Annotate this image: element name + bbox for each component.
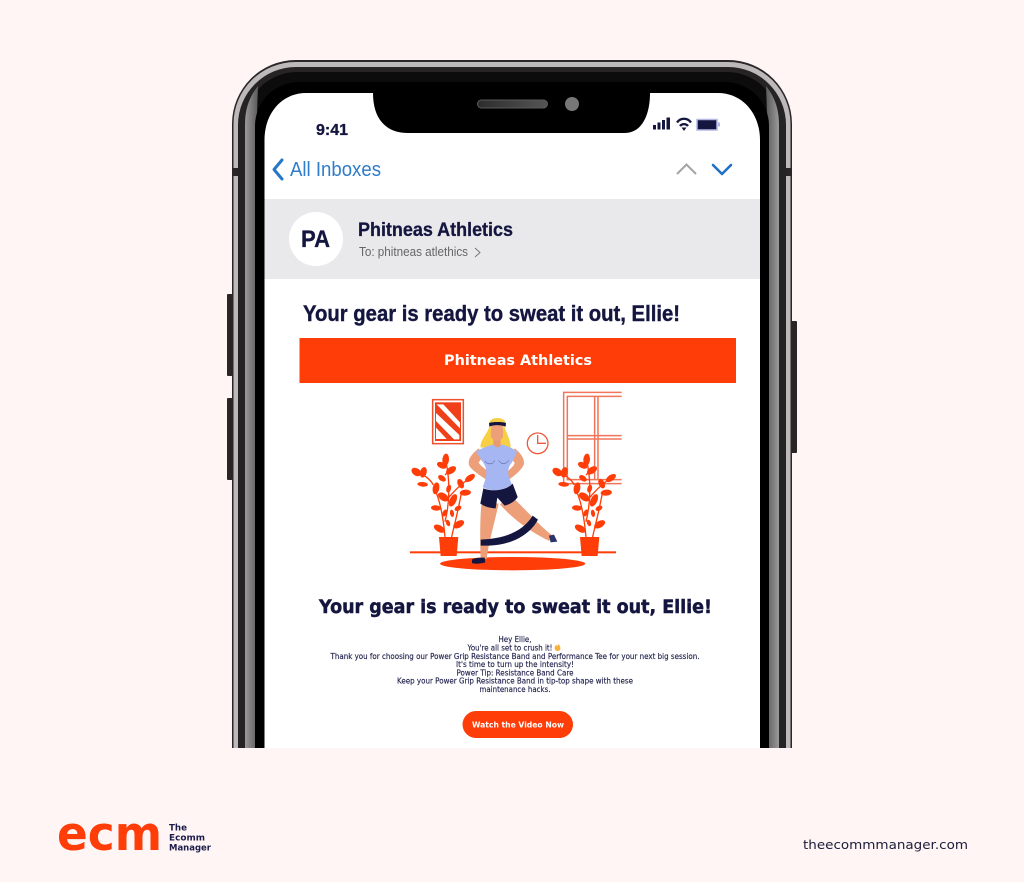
avatar xyxy=(289,212,343,266)
body copy: You're all set to crush it! xyxy=(467,644,552,652)
body copy: Hey Ellie, xyxy=(498,635,532,644)
resistance band xyxy=(481,516,538,546)
logo: ecm The Ecomm Manager: Manager xyxy=(169,844,212,854)
status icons xyxy=(653,118,720,131)
left plant xyxy=(410,453,476,556)
screen xyxy=(264,93,760,760)
body copy: Keep your Power Grip Resistance Band in tip-top shape with these xyxy=(397,676,633,686)
body copy: It's time to turn up the intensity! xyxy=(456,660,574,669)
down arrow xyxy=(713,165,731,174)
side buttons xyxy=(227,294,797,480)
sender name: Phitneas Athletics xyxy=(358,219,513,241)
body copy: Thank you for choosing our Power Grip Resistance Band and Performance Tee for your next big session. xyxy=(330,652,700,661)
sender header band: PA xyxy=(301,226,330,253)
floor mat xyxy=(440,557,585,570)
neck and face xyxy=(493,438,501,449)
floor line xyxy=(410,551,616,553)
orange banner xyxy=(300,338,736,383)
up arrow xyxy=(677,164,696,174)
body heading: Your gear is ready to sweat it out, Ellie! xyxy=(318,596,712,618)
side metal strips xyxy=(245,86,258,800)
body copy xyxy=(330,635,700,694)
body copy: Power Tip: Resistance Band Care xyxy=(456,668,574,678)
speaker xyxy=(478,100,548,108)
website url: theecommmanager.com xyxy=(803,837,968,852)
antenna bands xyxy=(232,168,792,176)
extended leg xyxy=(500,495,552,541)
headband and hair xyxy=(489,418,506,423)
call to action button xyxy=(462,711,573,738)
camera xyxy=(565,97,579,111)
phone email infographic xyxy=(58,60,967,852)
back hair xyxy=(480,427,511,448)
window xyxy=(564,392,622,484)
recipient: To: phitneas atlethics xyxy=(359,245,468,259)
body copy: maintenance hacks. xyxy=(480,685,550,694)
phone body xyxy=(227,60,797,820)
logo: ecm The Ecomm Manager: Ecomm xyxy=(169,834,205,844)
shorts xyxy=(480,484,518,508)
shoes xyxy=(472,558,485,564)
top xyxy=(476,444,517,490)
right plant xyxy=(551,453,617,556)
illustration: woman exercising with resistance band xyxy=(410,392,622,570)
call to action button: Watch the Video Now xyxy=(472,720,565,730)
standing leg xyxy=(480,503,499,559)
status time: 9:41 xyxy=(316,122,348,139)
battery xyxy=(697,120,717,130)
logo: ecm The Ecomm Manager: The xyxy=(169,824,187,834)
signal xyxy=(653,118,670,130)
sender header band xyxy=(264,199,760,279)
subject heading: Your gear is ready to sweat it out, Ellie! xyxy=(303,301,680,326)
orange banner: Phitneas Athletics xyxy=(444,353,592,369)
wall picture xyxy=(433,400,463,444)
back navigation: All Inboxes xyxy=(290,159,381,181)
icon: flame emoji xyxy=(555,644,560,651)
clock xyxy=(527,433,548,454)
arms xyxy=(469,448,524,482)
wifi xyxy=(677,119,691,126)
logo: ecm The Ecomm Manager: ecm xyxy=(57,807,162,862)
woman xyxy=(469,418,557,564)
